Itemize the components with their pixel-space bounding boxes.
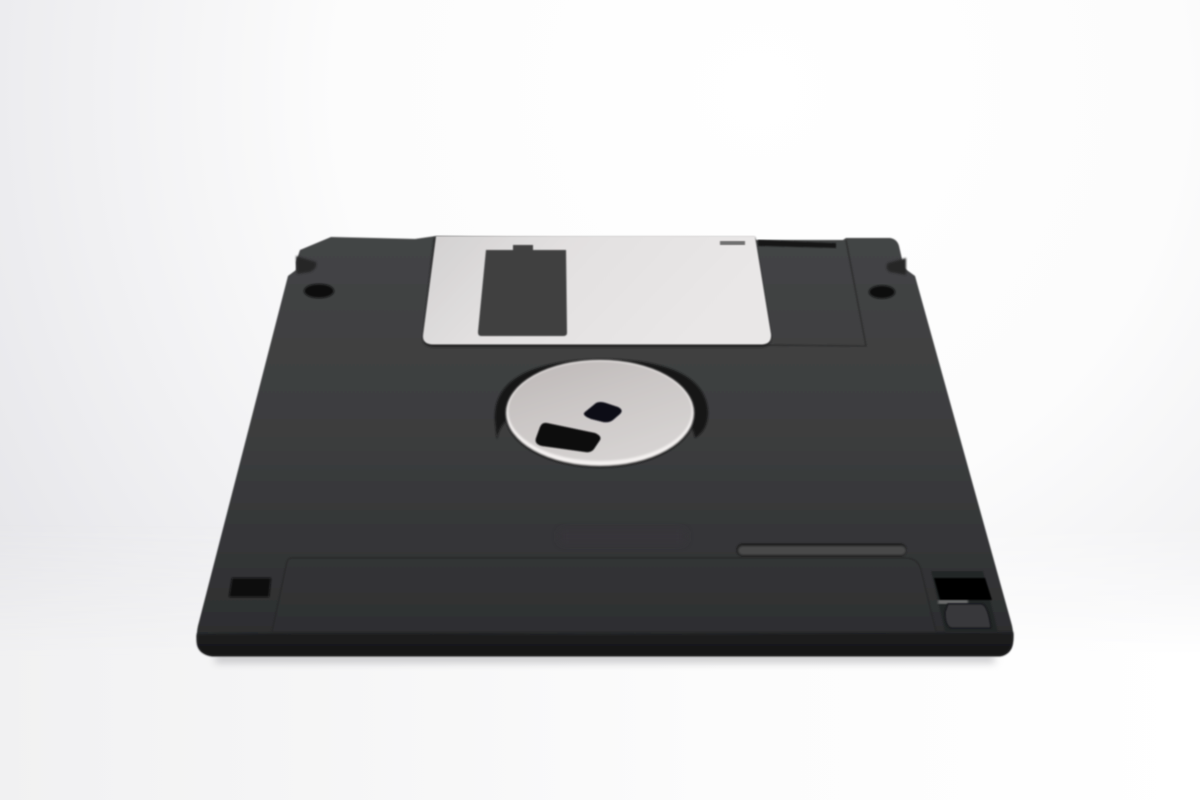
faint embossed mark — [560, 530, 685, 543]
corner notch left — [296, 256, 316, 274]
corner notch right — [886, 258, 906, 275]
hub spindle hole — [584, 402, 622, 422]
metal shutter — [423, 236, 771, 347]
label recess — [272, 558, 936, 632]
floppy disk — [197, 236, 1013, 656]
shutter window — [478, 245, 567, 336]
hub drive pin slot — [536, 423, 600, 452]
front edge — [197, 632, 1013, 656]
write-protect square hole — [229, 578, 271, 597]
disk shadow — [215, 654, 995, 663]
metal hub — [505, 360, 695, 468]
top slot — [758, 240, 836, 248]
shutter recess groove — [757, 240, 866, 346]
alignment hole left — [304, 284, 334, 298]
alignment hole right — [869, 286, 895, 298]
model pill — [736, 543, 907, 557]
shutter tab slot — [720, 241, 745, 245]
write-protect slider — [931, 571, 998, 632]
hub recess — [495, 359, 708, 440]
disk body — [197, 236, 1013, 656]
